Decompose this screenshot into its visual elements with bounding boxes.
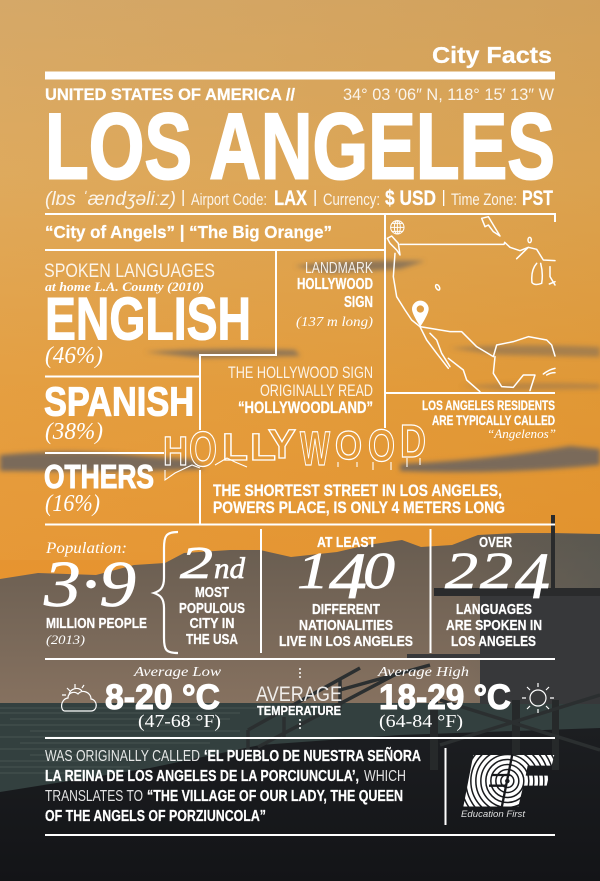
- hollywood sign outline: L: [222, 427, 248, 469]
- footer divider: [444, 748, 446, 825]
- hollywood sign outline: O: [189, 423, 217, 477]
- history text: OF THE ANGELS OF PORZIUNCOLA”: [45, 808, 266, 825]
- stat: second most populous: nd: [214, 552, 246, 585]
- residents callout: [422, 398, 556, 441]
- stat: second most populous: POPULOUS: [179, 601, 245, 617]
- panel: landmark: SIGN: [344, 294, 373, 311]
- panel: landmark: (137 m long): [296, 315, 373, 330]
- residents callout: ARE TYPICALLY CALLED: [432, 413, 555, 428]
- rule above temperature: [45, 658, 555, 660]
- stat: nationalities: NATIONALITIES: [299, 618, 393, 634]
- stat: languages: 2: [480, 543, 513, 600]
- stat: languages: LOS ANGELES: [451, 634, 536, 650]
- panel: spoken languages: SPANISH: [44, 378, 194, 424]
- temperature: centre label: TEMPERATURE: [257, 704, 341, 718]
- stat: population: (2013): [46, 632, 85, 647]
- temperature: high: Average High: [377, 665, 469, 680]
- header: city facts: City Facts: [432, 42, 552, 68]
- panel: hollywoodland fact: [228, 364, 373, 417]
- quick facts line: LAX: [274, 187, 307, 210]
- rule above history: [45, 737, 555, 739]
- quick facts line: $ USD: [385, 187, 436, 210]
- stat: nationalities: DIFFERENT: [312, 602, 380, 618]
- thick header rule: [45, 72, 555, 80]
- panel frame lines: [45, 214, 555, 524]
- hollywood sign outline: D: [400, 415, 426, 467]
- stat: population: [43, 540, 147, 647]
- panel: spoken languages: (38%): [45, 419, 103, 445]
- panel: landmark: [296, 260, 374, 330]
- icon: sun: [522, 683, 554, 713]
- quick facts line: Airport Code:: [191, 190, 267, 209]
- hollywood sign outline: Y: [268, 421, 296, 467]
- panel: spoken languages: (16%): [45, 491, 100, 517]
- stat: languages: LANGUAGES: [456, 602, 532, 618]
- stat: population: Population:: [45, 540, 127, 557]
- panel: hollywoodland fact: THE HOLLYWOOD SIGN: [228, 364, 373, 382]
- temperature: low: (47-68 °F): [138, 711, 221, 732]
- panel: landmark: LANDMARK: [305, 260, 374, 277]
- panel: landmark: HOLLYWOOD: [297, 276, 373, 293]
- stat: nationalities: LIVE IN LOS ANGELES: [279, 634, 413, 650]
- temperature: low: 8-20 °C: [105, 678, 220, 717]
- temperature: low: [105, 665, 222, 732]
- panel: spoken languages: at home L.A. County (2010): [45, 279, 204, 294]
- panel: hollywoodland fact: ORIGINALLY READ: [260, 382, 373, 400]
- temperature: high: (64-84 °F): [379, 711, 463, 732]
- footer rule: [45, 834, 555, 836]
- stat: population: 3·9: [43, 548, 136, 621]
- curly brace: [154, 532, 178, 653]
- stat: second most populous: 2: [180, 537, 213, 588]
- residents callout: LOS ANGELES RESIDENTS: [422, 398, 555, 413]
- temperature: low: Average Low: [133, 665, 222, 680]
- stat: second most populous: CITY IN: [190, 616, 234, 632]
- logo: EF Education First: [461, 754, 554, 817]
- icon: cloud and sun: [62, 684, 96, 711]
- map of western north america: [387, 217, 555, 392]
- stat: nationalities: [279, 535, 413, 650]
- stat: languages: 4: [515, 540, 550, 613]
- stat: second most populous: [179, 537, 246, 648]
- panel: spoken languages: (46%): [45, 343, 103, 369]
- stat: nationalities: 1: [297, 543, 329, 600]
- stat: nationalities: 4: [329, 540, 367, 613]
- icon: globe: [391, 221, 404, 234]
- quick facts line: Currency:: [323, 190, 380, 209]
- stat: languages: OVER: [479, 535, 512, 551]
- history text: TRANSLATES TO: [45, 788, 143, 805]
- panel: spoken languages: OTHERS: [44, 458, 154, 495]
- stat: languages: [445, 535, 550, 650]
- temperature: high: 18-29 °C: [379, 678, 511, 717]
- panel: spoken languages: ENGLISH: [45, 286, 251, 352]
- shortest street fact: POWERS PLACE, IS ONLY 4 METERS LONG: [213, 498, 505, 517]
- hollywood sign outline: O: [335, 424, 362, 468]
- history text: [45, 747, 421, 825]
- history text: “THE VILLAGE OF OUR LADY, THE QUEEN: [147, 788, 403, 805]
- hollywood sign outline: [163, 415, 426, 480]
- quick facts line: Time Zone:: [451, 190, 517, 209]
- residents callout: “Angelenos”: [487, 426, 556, 441]
- icon: location pin: [412, 301, 429, 327]
- quick facts line: (lɒs ˈændʒəliːz): [45, 189, 176, 210]
- nicknames: “City of Angels” | “The Big Orange”: [45, 222, 332, 242]
- shortest street fact: [213, 481, 505, 517]
- quick facts line: PST: [522, 187, 553, 210]
- stat: second most populous: MOST: [195, 585, 229, 601]
- panel: spoken languages: [44, 261, 251, 517]
- stat: nationalities: 0: [363, 543, 395, 600]
- history text: LA REINA DE LOS ANGELES DE LA PORCIUNCULA’,: [45, 768, 359, 785]
- coordinates: 34° 03 ′06″ N, 118° 15′ 13″ W: [343, 85, 554, 104]
- stat: languages: 2: [445, 543, 478, 600]
- quick facts line: [45, 187, 553, 210]
- history text: ‘EL PUEBLO DE NUESTRA SEÑORA: [204, 747, 421, 765]
- stat dividers: [261, 529, 430, 653]
- panel: spoken languages: SPOKEN LANGUAGES: [44, 261, 215, 282]
- borders and coastlines: [400, 242, 555, 285]
- temperature: high: [377, 665, 511, 732]
- shortest street fact: THE SHORTEST STREET IN LOS ANGELES,: [213, 481, 502, 500]
- temperature: centre label: AVERAGE: [256, 683, 342, 706]
- country label: UNITED STATES OF AMERICA //: [45, 86, 295, 104]
- history text: WAS ORIGINALLY CALLED: [45, 748, 200, 765]
- hollywood sign outline: H: [163, 428, 188, 474]
- stat: languages: ARE SPOKEN IN: [446, 618, 542, 634]
- stat: second most populous: THE USA: [186, 632, 238, 648]
- temperature: centre label: [256, 668, 342, 730]
- stat: population: MILLION PEOPLE: [46, 616, 147, 632]
- logo: EF Education First: Education First: [461, 809, 525, 820]
- stat: nationalities: AT LEAST: [317, 535, 376, 551]
- hollywood sign outline: L: [250, 427, 276, 469]
- panel: hollywoodland fact: “HOLLYWOODLAND”: [238, 399, 373, 417]
- history text: WHICH: [364, 768, 406, 785]
- hollywood sign outline: O: [368, 420, 395, 471]
- hollywood sign outline: W: [300, 423, 330, 476]
